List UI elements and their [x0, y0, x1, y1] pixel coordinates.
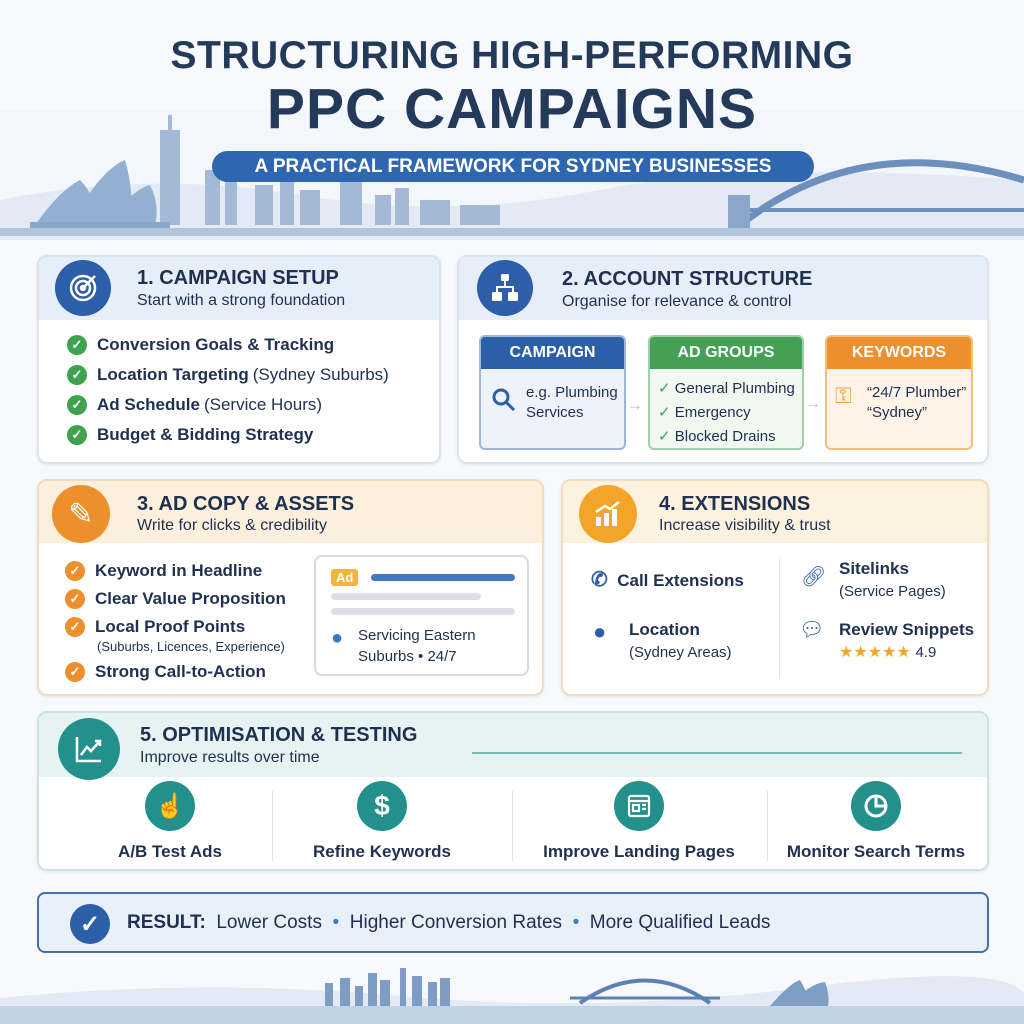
ad mockup: Servicing Eastern	[358, 627, 476, 644]
panel: campaign setup: Start with a strong foundation	[137, 292, 345, 309]
sitelinks	[801, 559, 946, 600]
checklist: Ad Schedule	[97, 395, 200, 414]
checklist: Strong Call-to-Action	[95, 662, 266, 681]
panel: optimisation	[37, 711, 989, 871]
item: landing pages: Improve Landing Pages	[543, 842, 735, 861]
panel: optimisation: 5. OPTIMISATION & TESTING	[140, 724, 417, 746]
ad mockup: ●	[331, 627, 343, 649]
box: ad groups: ✓ Emergency	[658, 404, 751, 421]
checklist: Local Proof Points	[95, 617, 245, 636]
panel: optimisation: Improve results over time	[140, 749, 320, 766]
location: ●	[593, 619, 606, 644]
review snippets	[799, 619, 974, 661]
review snippets: Review Snippets	[839, 620, 974, 639]
review snippets: ★★★★★ 4.9	[839, 644, 936, 661]
checklist	[65, 561, 286, 682]
icon: pencil	[52, 485, 110, 543]
box: keywords	[825, 335, 973, 450]
checklist	[67, 335, 389, 445]
panel: ad copy	[37, 479, 544, 696]
item: A/B test: A/B Test Ads	[118, 842, 222, 861]
checklist: Conversion Goals & Tracking	[97, 335, 334, 354]
box: ad groups: ✓ Blocked Drains	[658, 428, 776, 445]
icon: check	[70, 904, 110, 944]
arrow: →	[627, 397, 643, 414]
checklist: (Service Hours)	[204, 395, 322, 414]
result bar: RESULT: Lower Costs • Higher Conversion Rates • More Qualified Leads	[127, 912, 770, 933]
box: keywords: ⚿	[835, 383, 852, 408]
box: ad groups: ✓ General Plumbing	[658, 380, 795, 397]
checklist: ✓	[72, 427, 82, 442]
checklist: ✓	[72, 397, 82, 412]
icon: hierarchy	[477, 260, 533, 316]
skyline top background	[0, 115, 1024, 240]
icon: target	[55, 260, 111, 316]
bottom skyline	[0, 968, 1024, 1024]
panel: extensions	[561, 479, 989, 696]
item: A/B test: ☝	[155, 792, 185, 820]
sitelinks: 🔗︎	[801, 566, 826, 588]
checklist: ✓	[70, 591, 80, 606]
item: refine keywords: Refine Keywords	[313, 842, 451, 861]
box: campaign	[479, 335, 626, 450]
checklist: Location Targeting	[97, 365, 249, 384]
box: campaign: e.g. Plumbing	[526, 384, 618, 401]
item: refine keywords	[313, 781, 451, 861]
result bar	[37, 892, 989, 953]
icon: check: ✓	[80, 910, 100, 938]
box: campaign: Services	[526, 404, 584, 421]
box: keywords: “24/7 Plumber”	[867, 384, 966, 401]
checklist: (Sydney Suburbs)	[253, 365, 389, 384]
subtitle pill	[212, 151, 814, 182]
panel: campaign setup: 1. CAMPAIGN SETUP	[137, 267, 339, 289]
panel: campaign setup	[37, 255, 441, 464]
item: search terms: Monitor Search Terms	[787, 842, 965, 861]
icon: pencil: ✎	[68, 498, 94, 530]
box: ad groups	[648, 335, 804, 450]
subtitle pill: A PRACTICAL FRAMEWORK FOR SYDNEY BUSINESSES	[255, 156, 771, 177]
panel: ad copy: 3. AD COPY & ASSETS	[137, 493, 354, 515]
panel: extensions: Increase visibility & trust	[659, 517, 831, 534]
checklist: Clear Value Proposition	[95, 589, 286, 608]
location: (Sydney Areas)	[629, 644, 732, 661]
title	[170, 34, 853, 141]
box: keywords: “Sydney”	[867, 404, 927, 421]
sitelinks: (Service Pages)	[839, 583, 946, 600]
title: PPC CAMPAIGNS	[267, 77, 757, 141]
ad mockup	[314, 555, 529, 676]
ad mockup: Ad	[336, 570, 353, 585]
ad mockup: Suburbs • 24/7	[358, 648, 457, 665]
sitelinks: Sitelinks	[839, 559, 909, 578]
box: campaign: CAMPAIGN	[510, 344, 595, 361]
review snippets: 💬︎	[799, 619, 824, 641]
item: A/B test	[118, 781, 222, 861]
checklist: ✓	[70, 563, 80, 578]
panel: extensions: 4. EXTENSIONS	[659, 493, 810, 515]
checklist: (Suburbs, Licences, Experience)	[97, 639, 285, 654]
location: Location	[629, 620, 700, 639]
checklist: Keyword in Headline	[95, 561, 262, 580]
call extensions: ✆ Call Extensions	[591, 569, 744, 591]
location	[593, 619, 732, 661]
checklist: ✓	[70, 619, 80, 634]
icon: trend	[58, 718, 120, 780]
icon: chart	[579, 485, 637, 543]
box: ad groups: AD GROUPS	[678, 344, 774, 361]
title: STRUCTURING HIGH-PERFORMING	[170, 34, 853, 77]
checklist: Budget & Bidding Strategy	[97, 425, 313, 444]
box: keywords: KEYWORDS	[852, 344, 946, 361]
item: refine keywords: $	[374, 790, 390, 821]
panel: account structure: Organise for relevance & control	[562, 293, 791, 310]
panel: account structure	[457, 255, 989, 464]
checklist: ✓	[72, 337, 82, 352]
panel: ad copy: Write for clicks & credibility	[137, 517, 327, 534]
arrow: →	[805, 395, 821, 412]
item: landing pages	[543, 781, 735, 861]
checklist: ✓	[70, 664, 80, 679]
checklist: ✓	[72, 367, 82, 382]
panel: account structure: 2. ACCOUNT STRUCTURE	[562, 268, 812, 290]
item: search terms	[787, 781, 965, 861]
